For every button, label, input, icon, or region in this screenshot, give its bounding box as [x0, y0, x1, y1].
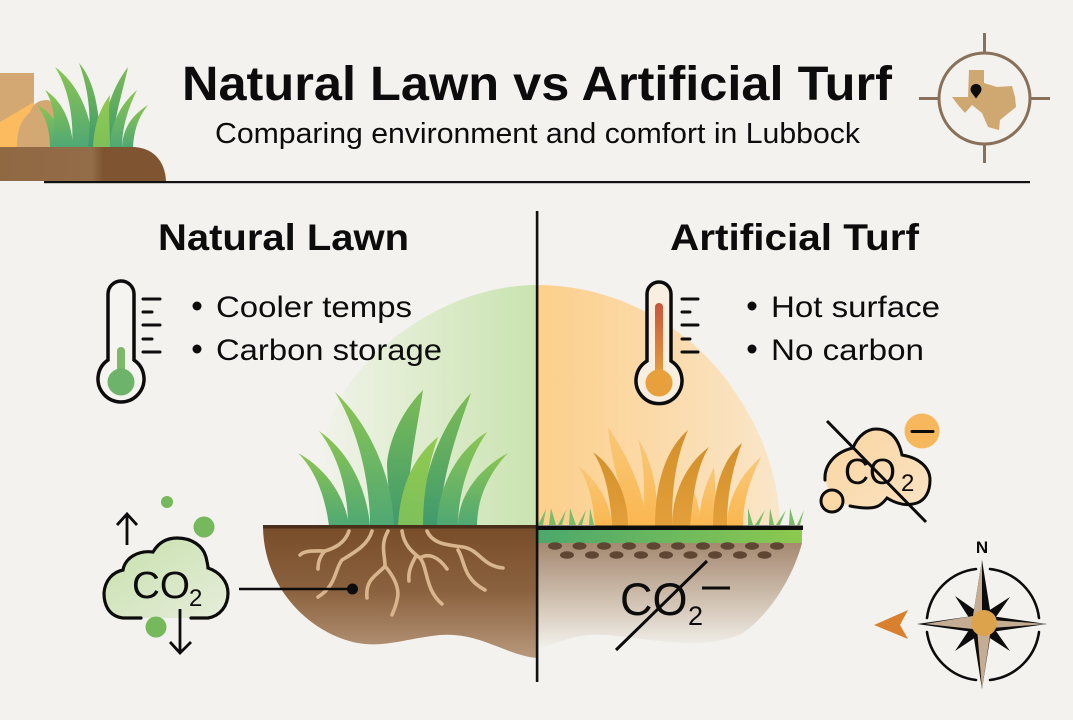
glow: orange half circle: [537, 285, 780, 525]
list: natural lawn benefits: [192, 291, 442, 367]
header rule: [44, 181, 1030, 183]
soil cross-section with roots: [263, 525, 537, 658]
header illustration: grass on mound: [0, 63, 166, 181]
dry orange blades: [577, 427, 761, 526]
icon: CO2 cloud absorbed: [104, 496, 228, 653]
roots: [300, 531, 503, 615]
list: natural lawn benefits: Cooler temps: [216, 291, 412, 324]
icon: crossed CO2 cloud: [821, 414, 940, 522]
crossed-out CO2: 2: [688, 601, 703, 631]
icon: compass rose: [917, 538, 1047, 689]
icon: crossed CO2 cloud: 2: [901, 470, 914, 497]
connector: CO2 into soil: [239, 584, 358, 594]
icon: green thermometer: [98, 281, 160, 402]
minus badge: [904, 414, 940, 448]
title: Natural Lawn vs Artificial Turf: [182, 58, 893, 111]
natural grass blades: [298, 390, 508, 526]
arrow up: [117, 514, 137, 545]
center divider: [536, 211, 538, 682]
glow: green half circle: [314, 285, 537, 525]
list: artificial turf drawbacks: Hot surface: [771, 291, 940, 324]
subtitle: Comparing environment and comfort in Lubbock: [215, 118, 861, 150]
arrow down: [170, 609, 191, 653]
arrow: west pointer: [874, 610, 908, 639]
icon: compass rose: N: [976, 538, 988, 557]
crossed-out CO2: [616, 561, 730, 650]
list: natural lawn benefits: Carbon storage: [216, 334, 442, 367]
pebble layer: [548, 542, 784, 559]
icon: crossed CO2 cloud: CO: [844, 451, 896, 492]
list: artificial turf drawbacks: [748, 291, 940, 367]
small green blades right: [748, 508, 804, 525]
artificial turf cross-section: [537, 427, 804, 650]
icon: orange thermometer: [636, 282, 698, 404]
icon: CO2 cloud absorbed: 2: [189, 585, 202, 612]
heading: Natural Lawn: Natural Lawn: [158, 217, 409, 258]
icon: CO2 cloud absorbed: CO: [132, 565, 190, 607]
list: artificial turf drawbacks: No carbon: [771, 334, 924, 367]
crossed-out CO2: CO: [620, 574, 688, 625]
heading: Artificial Turf: Artificial Turf: [670, 217, 920, 258]
small green blades left: [538, 508, 594, 525]
icon: Texas locator: [919, 33, 1050, 163]
